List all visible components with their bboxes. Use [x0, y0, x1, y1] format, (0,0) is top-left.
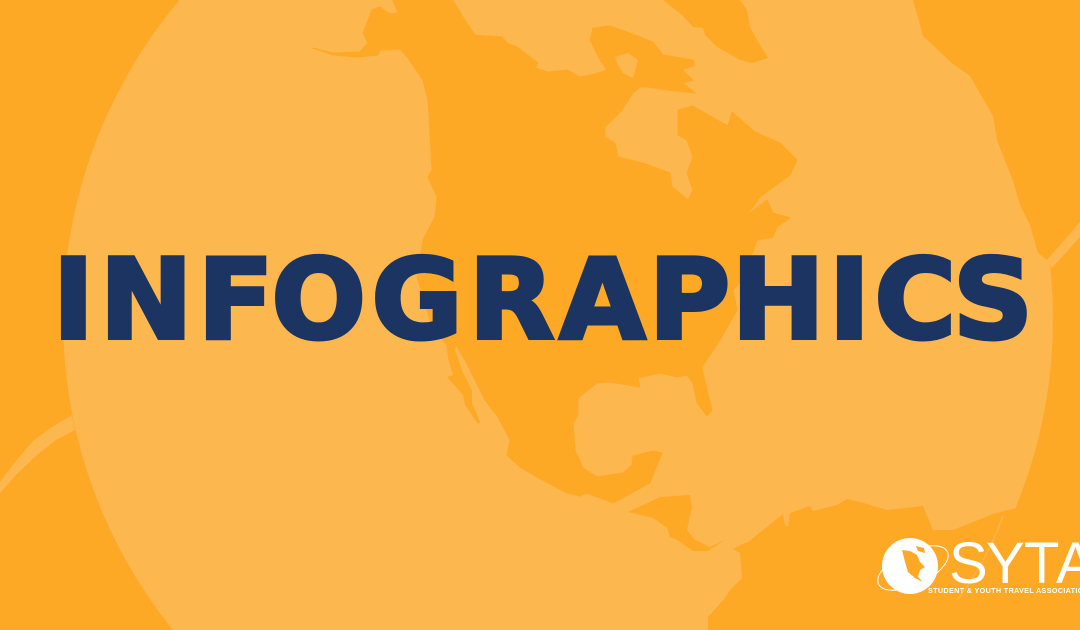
- continent: north and central america: [313, 0, 797, 503]
- continent: south america: [708, 480, 1080, 630]
- continent: greenland: [663, 0, 768, 63]
- SYTA logo: [871, 531, 1080, 600]
- logo orbit: [871, 537, 955, 599]
- continent: baja california: [445, 335, 480, 424]
- orbit ring right: [1047, 222, 1080, 268]
- continent: europe and africa: [913, 0, 1080, 268]
- continent: central america isthmus: [628, 495, 725, 551]
- hudson inlet: [615, 53, 638, 78]
- orbit ring lower right: [957, 516, 1003, 600]
- title: INFOGRAPHICS: [53, 236, 1033, 365]
- logo globe: [882, 538, 950, 600]
- orbit ring left: [0, 415, 75, 493]
